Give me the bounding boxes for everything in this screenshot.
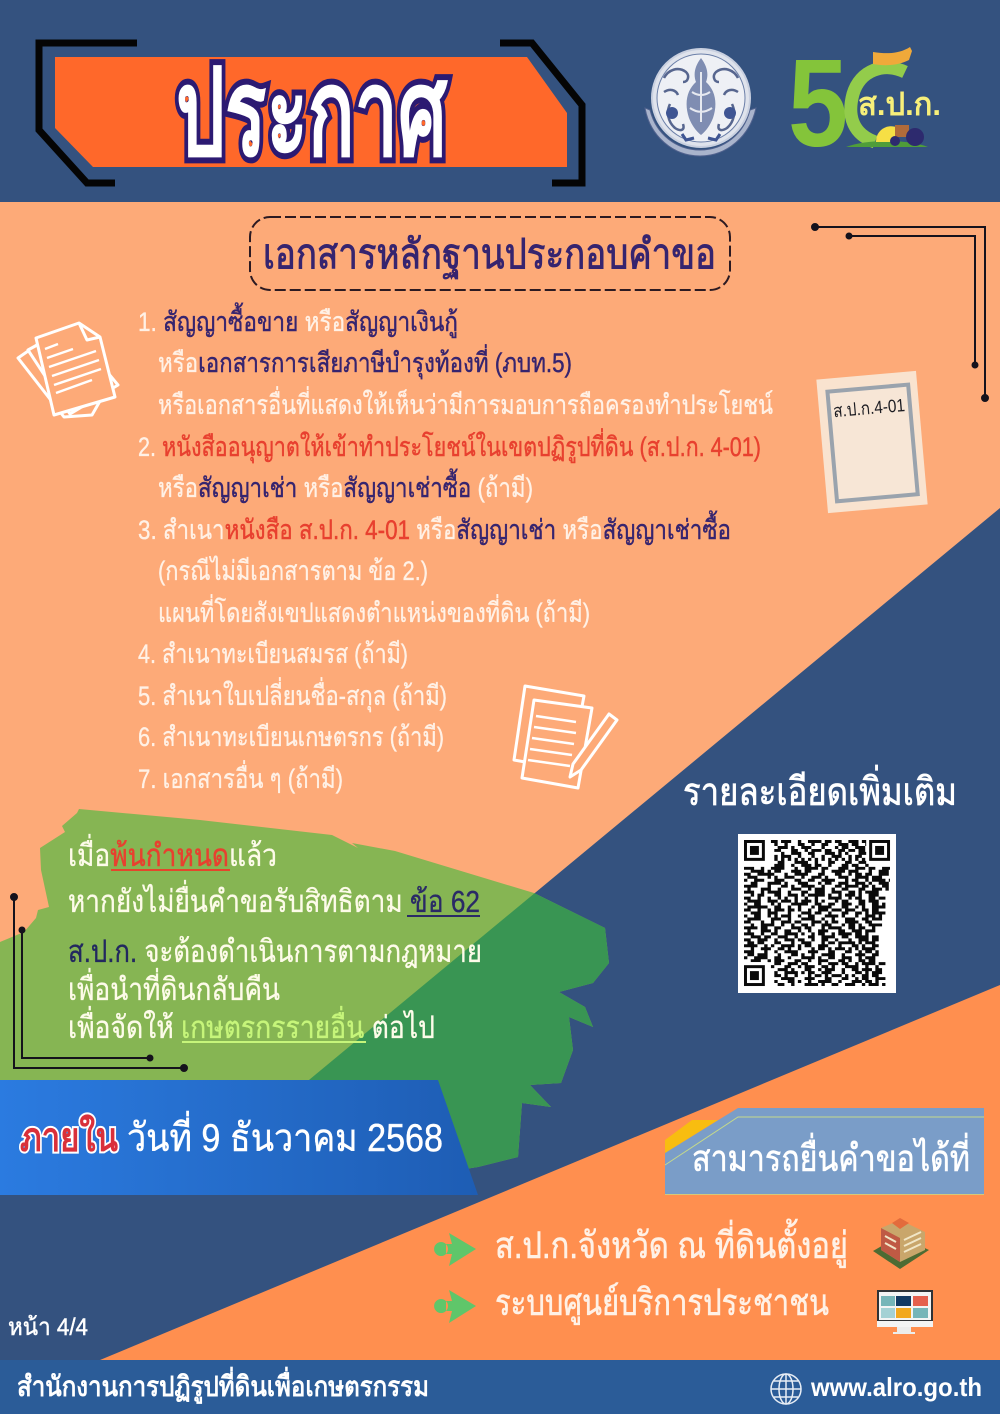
organisation name: สำนักงานการปฏิรูปที่ดินเพื่อเกษตรกรรม [17,1366,429,1404]
text block: document list: หรือเอกสารอื่นที่แสดงให้เห็นว่ามีการมอบการถือครองทำประโยชน์ [158,386,773,420]
item 2: 2. หนังสืออนุญาตให้เข้าทำประโยชน์ในเขตปฏิรูปที่ดิน (ส.ป.ก. 4-01) [138,428,761,464]
background: orange lower panel [100,985,1000,1360]
icon: green arrow [434,1290,476,1323]
decoration: left circuit lines [11,894,187,1071]
callout text: ส.ป.ก. จะต้องดำเนินการตามกฎหมาย [68,934,482,969]
item 1: 1. สัญญาซื้อขาย หรือสัญญาเงินกู้ [138,302,458,338]
icon: monitor [877,1290,933,1334]
heading text: เอกสารหลักฐานประกอบคำขอ [263,231,716,279]
text block: document list: หรือเอกสารการเสียภาษีบำรุงท้องที่ (ภบท.5) [158,344,572,380]
item 7: 7. เอกสารอื่น ๆ (ถ้ามี) [138,760,343,794]
text block: document list [138,302,773,794]
item 5: 5. สำเนาใบเปลี่ยนชื่อ-สกุล (ถ้ามี) [138,677,447,713]
form label: ส.ป.ก.4-01 [832,395,906,421]
heading: more details: รายละเอียดเพิ่มเติม [683,765,957,814]
decoration: top-right circuit lines [812,224,988,401]
background: navy diagonal panel [0,508,1000,1414]
panel: section heading [250,217,730,290]
logo: ALRO seal [645,49,756,156]
callout text: เพื่อจัดให้ เกษตรกรรายอื่น ต่อไป [68,1006,435,1045]
callout text: หากยังไม่ยื่นคำขอรับสิทธิตาม ข้อ 62 [68,880,480,919]
logo: 50 years ALRO: 5 [788,35,848,173]
item 3: 3. สำเนาหนังสือ ส.ป.ก. 4-01 หรือสัญญาเช่า หรือสัญญาเช่าซื้อ [138,510,731,545]
callout text [68,834,482,1045]
website: www.alro.go.th [810,1372,982,1402]
item: provincial office: ส.ป.ก.จังหวัด ณ ที่ดินตั้งอยู่ [495,1218,848,1268]
callout text: เมื่อพ้นกำหนดแล้ว [68,834,277,873]
icon: documents with pencil [514,686,617,788]
item: provincial office [434,1218,848,1268]
logo: 50 years ALRO [788,35,941,173]
title banner [39,43,582,183]
callout text: เพื่อนำที่ดินกลับคืน [68,968,280,1007]
deadline banner [0,1080,478,1195]
item: service centre: ระบบศูนย์บริการประชาชน [495,1282,829,1325]
logo text: ส.ป.ก. [858,86,941,122]
panel: where to submit [665,1108,984,1195]
QR code [738,834,902,993]
deadline date: วันที่ 9 ธันวาคม 2568 [127,1111,443,1160]
title: ประกาศ [176,45,448,181]
footer bar [0,1360,1000,1414]
item: service centre [434,1282,829,1325]
item 6: 6. สำเนาทะเบียนเกษตรกร (ถ้ามี) [138,722,444,752]
page number: หน้า 4/4 [8,1314,88,1341]
icon: building [873,1218,929,1269]
icon: green arrow [434,1233,476,1266]
text block: document list: หรือสัญญาเช่า หรือสัญญาเช่าซื้อ (ถ้ามี) [158,468,533,503]
icon: globe [771,1374,801,1404]
header band [0,0,1000,202]
icon: stack of documents [18,323,118,417]
text block: document list: (กรณีไม่มีเอกสารตาม ข้อ 2.) [158,556,428,586]
icon: form ส.ป.ก. 4-01 [816,371,928,513]
item 4: 4. สำเนาทะเบียนสมรส (ถ้ามี) [138,639,408,669]
deadline label: ภายใน [20,1114,118,1160]
text block: document list: แผนที่โดยสังเขปแสดงตำแหน่งของที่ดิน (ถ้ามี) [158,594,590,628]
panel: green brush callout [0,809,609,1195]
